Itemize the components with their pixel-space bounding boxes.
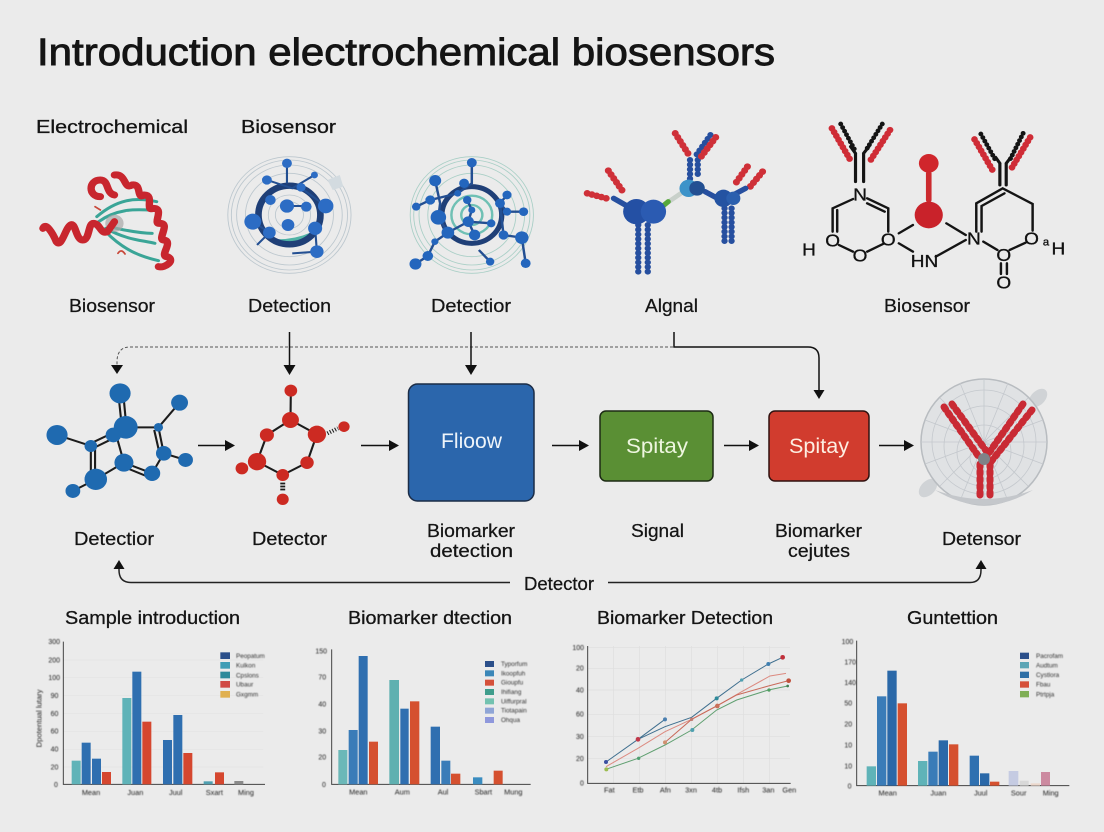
bar chart: sample introduction: 0 xyxy=(54,782,58,789)
arrow: feedback to left molecule xyxy=(114,560,510,582)
icon: red ball-and-stick molecule xyxy=(236,385,350,505)
line chart: biomarker detection: 40 xyxy=(576,687,584,694)
bar chart: guntettion: Audtum xyxy=(1036,662,1058,669)
bar chart: biomarker dtection: Ohqua xyxy=(501,717,520,724)
bar chart: sample introduction: Gxgmm xyxy=(236,692,258,699)
icon: chemical structure with antibodies: O xyxy=(996,272,1011,293)
label: Biosensor: Biosensor xyxy=(69,295,155,316)
label: Algnal: Algnal xyxy=(645,295,698,316)
bar chart: sample introduction: Peopatum xyxy=(236,653,265,660)
icon: chemical structure with antibodies xyxy=(802,124,1065,293)
bar chart: guntettion: Pacrofam xyxy=(1036,653,1063,660)
label: Biomarker cejutes: Biomarker xyxy=(775,520,862,541)
line chart: biomarker detection: 0 xyxy=(580,781,584,788)
icon: chemical structure with antibodies: N xyxy=(967,228,981,248)
chart heading: Biomarker Detection: Biomarker Detection xyxy=(597,607,773,628)
line chart: biomarker detection: 100 xyxy=(572,645,584,652)
arrow: green box to red box xyxy=(724,440,759,451)
bar chart: guntettion: 10 xyxy=(844,742,852,749)
label: Biomarker detection xyxy=(427,520,515,561)
label: Detector: Detector xyxy=(252,528,327,549)
label: Detensor: Detensor xyxy=(942,528,1021,549)
label: Detection: Detection xyxy=(248,295,331,316)
icon: protein ribbon xyxy=(43,175,171,267)
bar chart: sample introduction xyxy=(34,639,265,797)
bar chart: guntettion xyxy=(842,639,1069,797)
bar chart: guntettion: 100 xyxy=(842,639,853,646)
bar chart: biomarker dtection: Aum xyxy=(395,787,410,796)
bar chart: sample introduction: Ming xyxy=(238,788,254,797)
icon: antibody in grey sphere xyxy=(915,379,1051,505)
line chart: biomarker detection: 4tb xyxy=(712,786,722,795)
heading: Electrochemical: Electrochemical xyxy=(36,116,188,137)
box: blue flow step: Flioow xyxy=(441,430,503,453)
label: Detector feedback: Detector xyxy=(524,573,594,594)
bar chart: guntettion: Juan xyxy=(930,788,946,797)
icon: blue molecule in circular rings xyxy=(228,157,351,273)
bar chart: sample introduction: Kulkon xyxy=(236,663,256,670)
bar chart: guntettion: Ptrtpja xyxy=(1036,691,1055,698)
icon: chemical structure with antibodies: O xyxy=(1024,228,1039,248)
bar chart: biomarker dtection: Mung xyxy=(504,787,523,796)
bar chart: biomarker dtection: Tiotapain xyxy=(501,708,527,715)
label: Detectior: Detectior xyxy=(431,295,511,316)
icon: blue and teal molecule in circular rings xyxy=(409,157,533,273)
heading: Biosensor: Biosensor xyxy=(241,116,336,137)
bar chart: sample introduction: 90 xyxy=(51,693,59,700)
line chart: biomarker detection xyxy=(572,645,796,795)
bar chart: guntettion: 170 xyxy=(844,659,856,666)
line chart: biomarker detection: 3an xyxy=(762,786,774,795)
bar chart: sample introduction: 100 xyxy=(48,675,60,682)
line chart: biomarker detection: 30 xyxy=(576,734,584,741)
arrow: dashed line to first molecule xyxy=(111,347,673,374)
label: Biomarker detection: Biomarker xyxy=(427,520,515,541)
bar chart: guntettion: 20 xyxy=(844,722,852,729)
line chart: biomarker detection: Ifsh xyxy=(737,786,749,795)
box: green step: Spitay xyxy=(626,435,689,458)
bar chart: guntettion: Ming xyxy=(1043,788,1059,797)
label: Biomarker cejutes: cejutes xyxy=(788,540,850,561)
bar chart: sample introduction: Juul xyxy=(169,788,183,797)
icon: chemical structure with antibodies: O xyxy=(881,229,896,249)
bar chart: sample introduction: Ubaur xyxy=(236,682,253,689)
arrow: flow box to green box xyxy=(552,440,589,451)
icon: chemical structure with antibodies: a xyxy=(1043,237,1050,249)
bar chart: sample introduction: Mean xyxy=(82,788,100,797)
line chart: biomarker detection: 20 xyxy=(576,666,584,673)
label: Biosensor right: Biosensor xyxy=(884,295,970,316)
line chart: biomarker detection: 60 xyxy=(576,712,584,719)
arrow: second molecule to flow box xyxy=(361,440,399,451)
icon: chemical structure with antibodies: N xyxy=(853,184,867,205)
bar chart: guntettion: Fbau xyxy=(1036,682,1051,689)
arrow: red box to sphere xyxy=(879,440,914,451)
bar chart: biomarker dtection: 30 xyxy=(318,728,326,735)
icon: blue ball-and-stick molecule xyxy=(46,383,193,498)
line chart: biomarker detection: Fat xyxy=(604,786,615,795)
bar chart: guntettion: Sour xyxy=(1011,788,1027,797)
bar chart: biomarker dtection: Aul xyxy=(438,787,449,796)
icon: chemical structure with antibodies: O xyxy=(853,245,867,265)
bar chart: biomarker dtection: Typorfum xyxy=(501,661,527,668)
title: Introduction electrochemical biosensors xyxy=(37,32,775,74)
arrow: down to flow box xyxy=(465,332,477,375)
bar chart: biomarker dtection: 150 xyxy=(315,648,327,655)
bar chart: biomarker dtection: Uiffurpral xyxy=(501,698,527,705)
bar chart: sample introduction: 60 xyxy=(51,711,59,718)
label: Biomarker detection: detection xyxy=(430,540,513,561)
bar chart: guntettion: 140 xyxy=(844,680,856,687)
bar chart: sample introduction: 200 xyxy=(48,657,60,664)
bar chart: guntettion: Juul xyxy=(974,788,988,797)
icon: branched antibody molecule xyxy=(587,133,763,275)
bar chart: sample introduction: Dpotentual lutary xyxy=(34,689,43,747)
label: Detectior: Detectior xyxy=(74,528,154,549)
bar chart: sample introduction: 60 xyxy=(51,729,59,736)
line chart: biomarker detection: 3xn xyxy=(685,786,697,795)
bar chart: biomarker dtection: Sbart xyxy=(475,787,492,796)
bar chart: sample introduction: 40 xyxy=(51,747,59,754)
line chart: biomarker detection: 20 xyxy=(576,756,584,763)
icon: chemical structure with antibodies: H xyxy=(1051,238,1065,258)
chart heading: Biomarker dtection: Biomarker dtection xyxy=(348,607,512,628)
arrow: feedback to right sphere xyxy=(608,560,986,582)
bar chart: biomarker dtection: Ihifiang xyxy=(501,689,522,696)
icon: chemical structure with antibodies: H xyxy=(802,239,816,259)
box: green step xyxy=(600,411,713,481)
chart heading: Sample introduction: Sample introduction xyxy=(65,607,240,628)
bar chart: biomarker dtection: 20 xyxy=(318,755,326,762)
arrow: first molecule to second xyxy=(198,440,235,451)
bar chart: biomarker dtection xyxy=(315,648,531,796)
bar chart: biomarker dtection: 0 xyxy=(322,782,326,789)
bar chart: guntettion: Cystlora xyxy=(1036,672,1060,679)
arrow: elbow down to red box xyxy=(674,332,824,399)
bar chart: sample introduction: Sxart xyxy=(206,788,223,797)
bar chart: guntettion: 50 xyxy=(844,701,852,708)
box: red step xyxy=(769,411,869,481)
bar chart: sample introduction: Juan xyxy=(127,788,143,797)
line chart: biomarker detection: Afn xyxy=(660,786,671,795)
bar chart: sample introduction: 20 xyxy=(51,764,59,771)
box: red step: Spitay xyxy=(789,435,850,458)
bar chart: biomarker dtection: 40 xyxy=(318,702,326,709)
bar chart: biomarker dtection: Gioupfu xyxy=(501,680,524,687)
icon: chemical structure with antibodies: HN xyxy=(911,250,938,271)
icon: chemical structure with antibodies: O xyxy=(825,230,840,251)
bar chart: sample introduction: 300 xyxy=(48,639,60,646)
box: blue flow step xyxy=(408,384,534,501)
chart heading: Guntettion: Guntettion xyxy=(907,607,998,628)
label: Signal: Signal xyxy=(631,520,684,541)
bar chart: biomarker dtection: 70 xyxy=(318,674,326,681)
arrow: down to detector molecule xyxy=(284,332,296,375)
icon: chemical structure with antibodies: O xyxy=(996,244,1011,265)
bar chart: guntettion: Mean xyxy=(878,788,897,797)
bar chart: biomarker dtection: Ikoopfuh xyxy=(501,670,526,677)
bar chart: guntettion: 10 xyxy=(844,763,852,770)
bar chart: sample introduction: Cpslons xyxy=(236,672,259,679)
bar chart: guntettion: 0 xyxy=(848,783,852,790)
line chart: biomarker detection: Gen xyxy=(782,786,796,795)
label: Biomarker cejutes xyxy=(775,520,862,561)
bar chart: biomarker dtection: Mean xyxy=(349,787,368,796)
line chart: biomarker detection: Etb xyxy=(632,786,643,795)
